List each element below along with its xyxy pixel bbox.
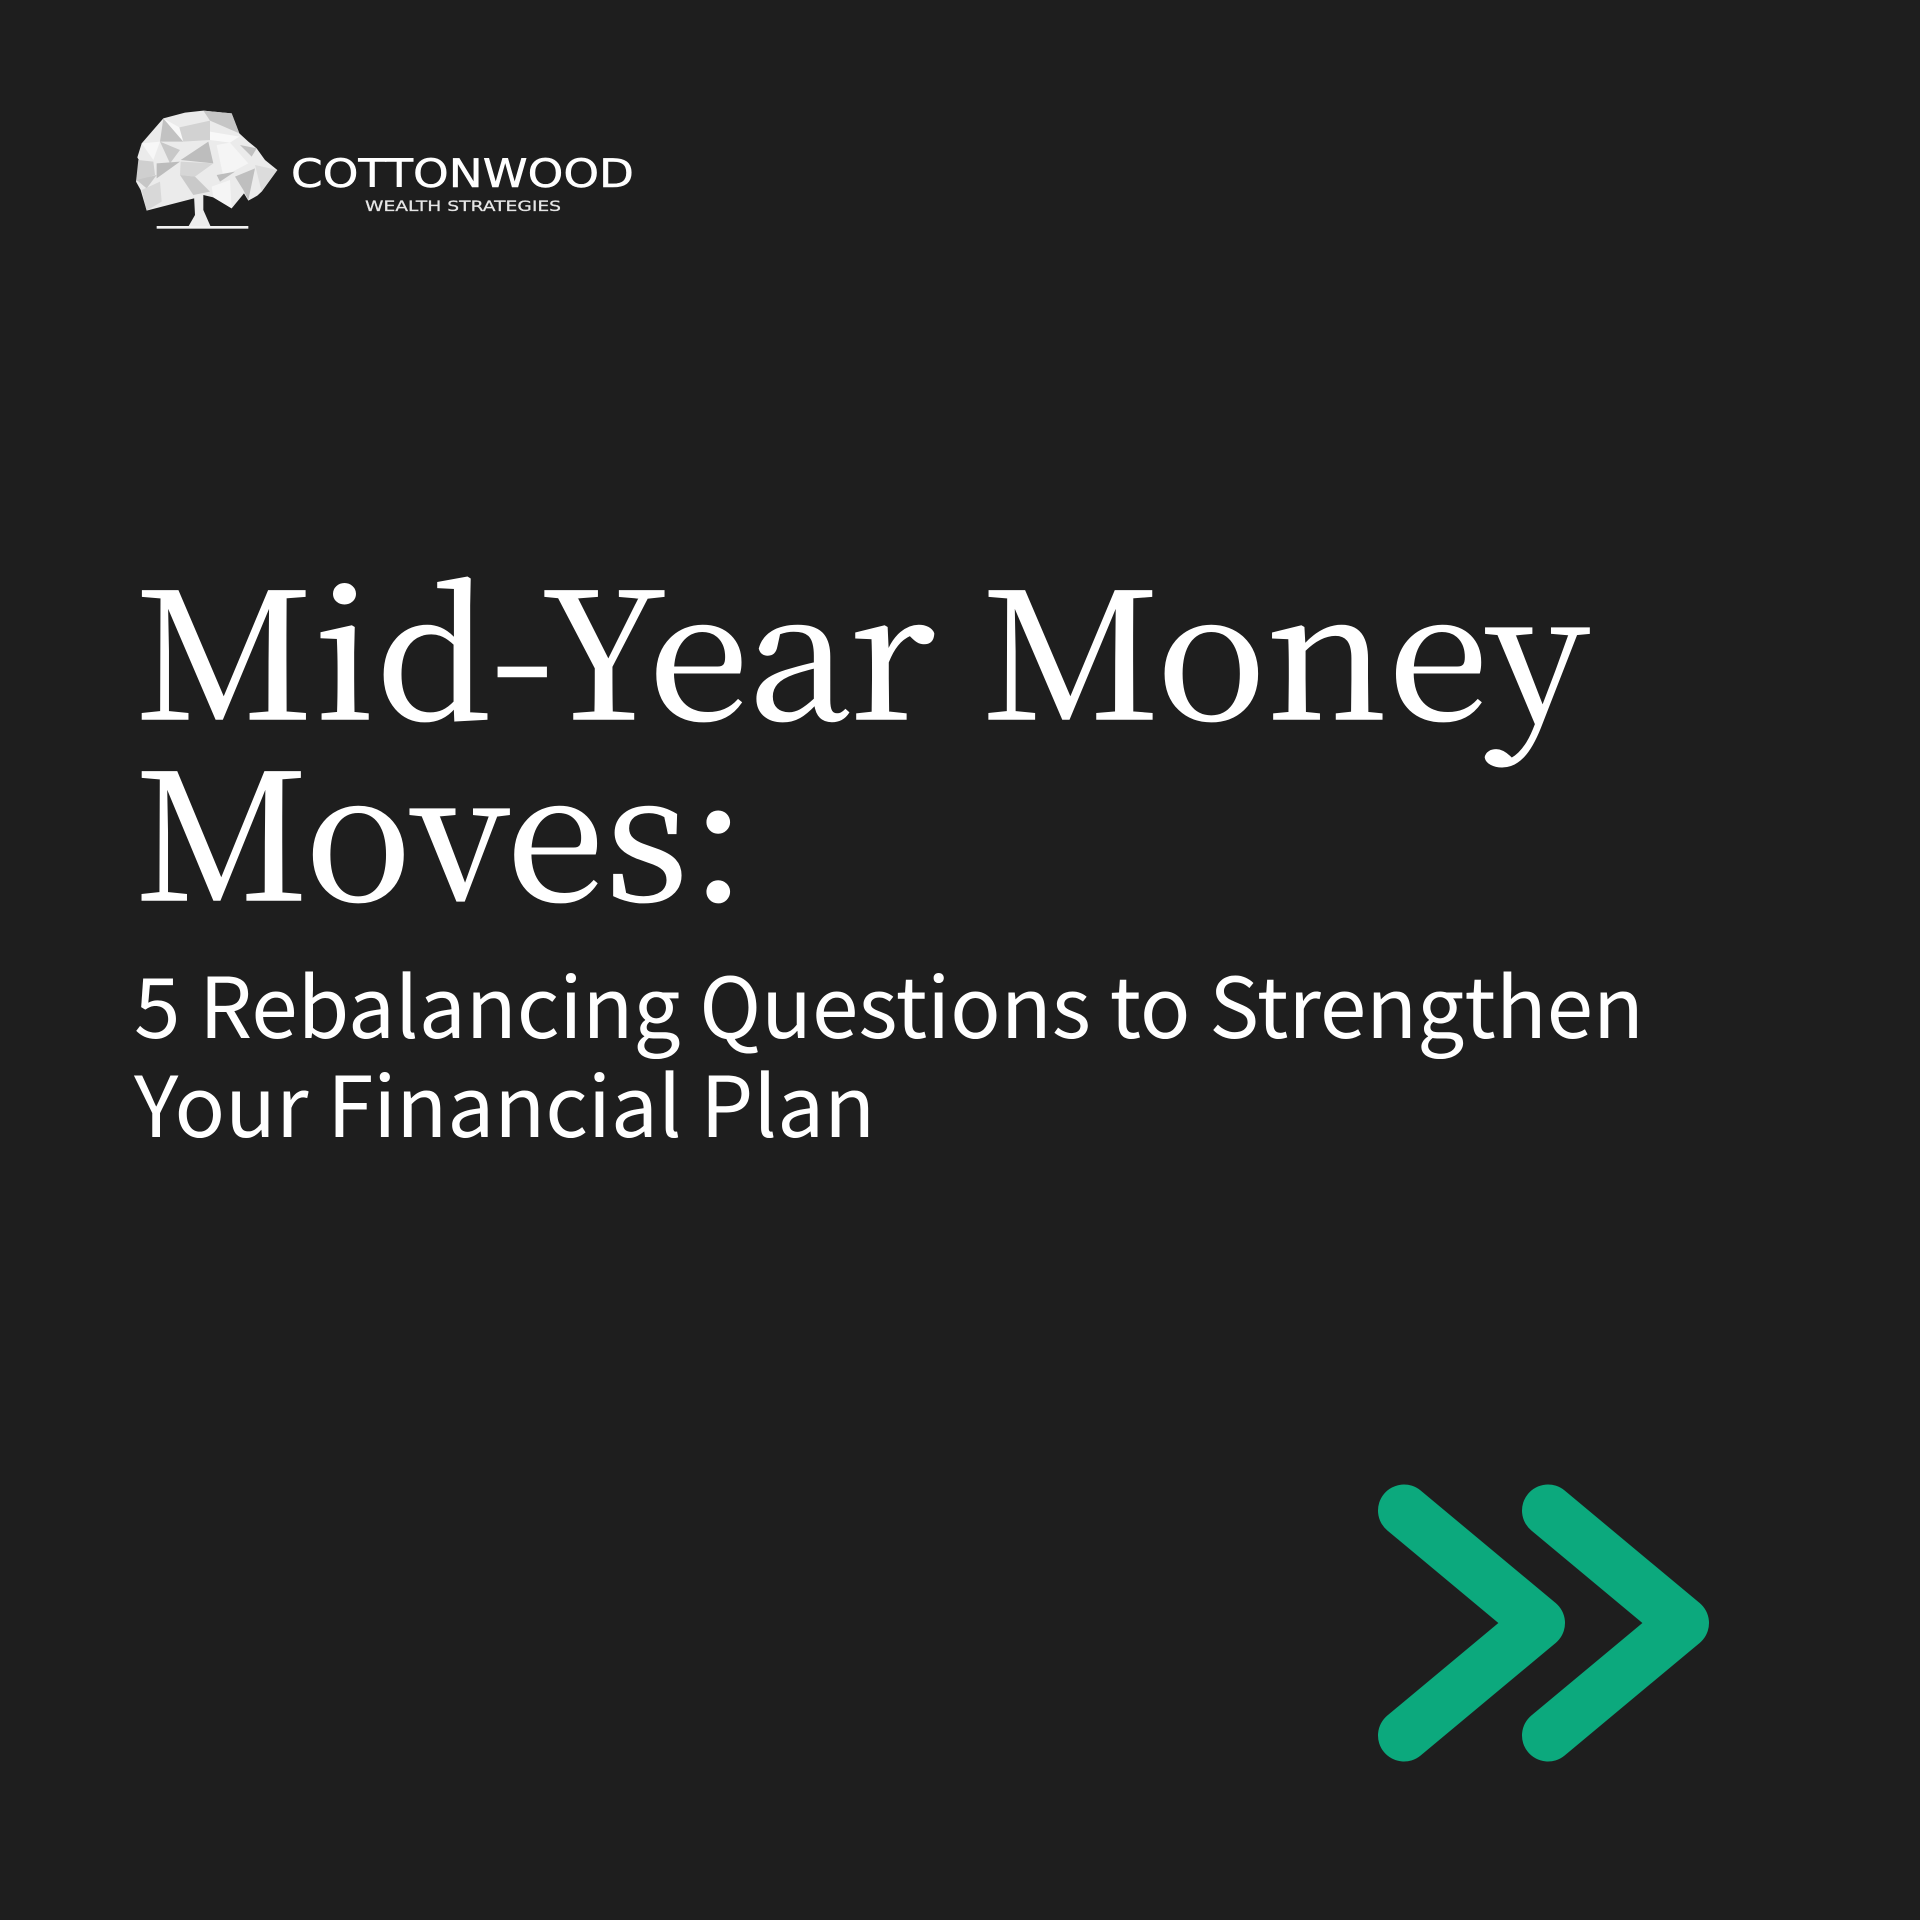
icon: tree trunk <box>188 195 211 227</box>
icon: ground line <box>157 226 248 229</box>
title: Moves: <box>135 698 748 951</box>
icon: low-poly tree <box>136 111 277 229</box>
title: Mid-Year Money <box>135 517 1589 770</box>
subtitle: Your Financial Plan <box>134 1041 875 1162</box>
logo tagline: WEALTH STRATEGIES <box>365 199 561 215</box>
logo wordmark: COTTONWOOD <box>291 152 634 197</box>
logo: Cottonwood Wealth Strategies <box>136 110 634 229</box>
subtitle: 5 Rebalancing Questions to Strengthen <box>134 942 1644 1063</box>
